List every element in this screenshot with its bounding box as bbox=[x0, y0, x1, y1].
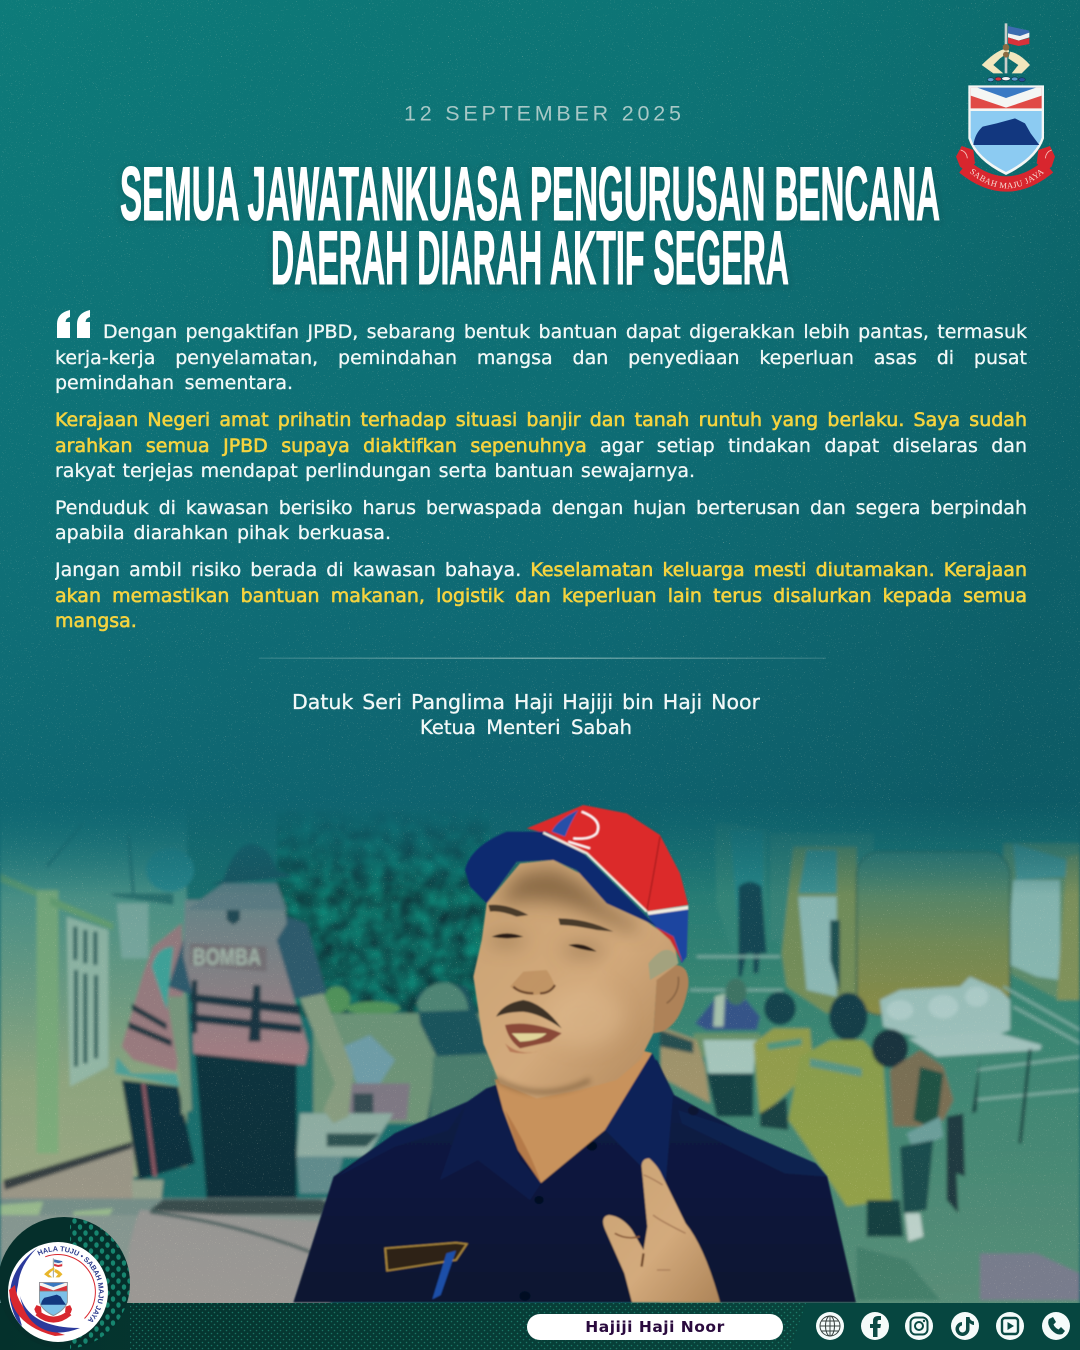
label: BOMBA: BOMBA bbox=[193, 944, 261, 971]
name pill bbox=[527, 1314, 783, 1340]
photo: relief centre with tents bbox=[660, 800, 1080, 1310]
main rescuer bbox=[166, 916, 327, 999]
icon: website globe bbox=[816, 1312, 844, 1340]
name badge bbox=[385, 1243, 467, 1271]
tent frame left bbox=[782, 847, 857, 1013]
date: 12 SEPTEMBER 2025 bbox=[404, 102, 681, 126]
icon: youtube bbox=[996, 1312, 1024, 1340]
text: Kerajaan Negeri amat prihatin terhadap situasi banjir dan tanah runtuh yang berlaku. Saya sudah bbox=[55, 409, 1027, 431]
social icons bbox=[816, 1312, 1070, 1340]
flag pole bbox=[1005, 23, 1007, 73]
paragraph 1 bbox=[55, 321, 1027, 394]
text: kerja-kerja penyelamatan, pemindahan mangsa dan penyediaan keperluan asas di pusat bbox=[55, 347, 1027, 369]
small crest bbox=[34, 1258, 72, 1320]
logo badge: Hala Tuju Sabah Maju Jaya bbox=[0, 1217, 130, 1349]
volunteer seated right bbox=[872, 1029, 908, 1068]
floor mats bbox=[857, 1247, 940, 1300]
volunteer vest 2 bbox=[829, 993, 868, 1041]
icon: tiktok bbox=[951, 1312, 979, 1340]
text: rakyat terjejas mendapat perlindungan serta bantuan sewajarnya. bbox=[55, 460, 695, 482]
swooshes bbox=[10, 1248, 37, 1326]
cap crown bbox=[527, 805, 688, 912]
volunteer vest 1 bbox=[764, 992, 796, 1025]
eyes bbox=[492, 933, 597, 952]
paragraph 3 bbox=[55, 497, 1027, 544]
boat floor bbox=[0, 1146, 136, 1200]
raised hand bbox=[603, 1158, 720, 1302]
second rescuer bbox=[115, 1057, 180, 1087]
cap emblem bbox=[552, 810, 578, 837]
paragraph 2 bbox=[55, 409, 1027, 482]
neck bbox=[495, 1040, 652, 1183]
signatory role: Ketua Menteri Sabah bbox=[420, 716, 632, 739]
icon: facebook bbox=[861, 1312, 889, 1340]
portrait: chief minister bbox=[293, 805, 856, 1302]
face bbox=[473, 860, 678, 1098]
floor lines bbox=[690, 957, 1080, 1100]
chair bbox=[738, 882, 767, 977]
woman at table bbox=[695, 997, 760, 1030]
photo: rescuers by flooded building bbox=[0, 823, 660, 1303]
boat cargo bbox=[343, 1035, 395, 1083]
text: pemindahan sementara. bbox=[55, 372, 293, 394]
building wall bbox=[0, 840, 190, 1184]
arms holding pole bbox=[982, 45, 1030, 73]
signature bbox=[292, 690, 760, 739]
divider bbox=[259, 658, 826, 659]
flood ground bbox=[313, 1013, 520, 1123]
state crest: Sabah coat of arms bbox=[956, 23, 1055, 184]
flag bbox=[1008, 26, 1029, 37]
title bbox=[120, 152, 940, 301]
icon: instagram bbox=[905, 1312, 933, 1340]
table bbox=[908, 1032, 1042, 1057]
moustache bbox=[496, 1000, 562, 1028]
text: apabila diarahkan pihak berkuasa. bbox=[55, 522, 391, 544]
collar left bbox=[440, 1088, 541, 1200]
text: akan memastikan bantuan makanan, logistik dan keperluan lain terus disalurkan kepada semua bbox=[55, 585, 1027, 607]
collar right bbox=[605, 1053, 673, 1190]
shirt bbox=[293, 1060, 856, 1302]
boat hull lower bbox=[0, 1215, 330, 1310]
body text bbox=[55, 321, 1027, 632]
main tent panel bbox=[857, 852, 1010, 1015]
cap back panel bbox=[647, 907, 688, 963]
nose bbox=[510, 970, 555, 995]
chin shadow bbox=[495, 1078, 590, 1092]
mountain bbox=[973, 118, 1039, 145]
volunteer left bbox=[660, 1027, 710, 1103]
text: arahkan semua JPBD supaya diaktifkan sepenuhnya agar setiap tindakan dapat diselaras dan bbox=[55, 435, 1027, 457]
third rescuer bbox=[417, 985, 493, 1123]
quote mark icon bbox=[57, 310, 90, 338]
text: Penduduk di kawasan berisiko harus berwaspada dengan hujan berterusan dan segera berpindah bbox=[55, 497, 1027, 519]
icon: phone bbox=[1042, 1312, 1070, 1340]
logo ring text: HALA TUJU • SABAH MAJU JAYA bbox=[37, 1246, 104, 1322]
eyebrows bbox=[488, 905, 613, 932]
food packs bbox=[880, 977, 1010, 1038]
text: Jangan ambil risiko berada di kawasan bahaya. Keselamatan keluarga mesti diutamakan. Kerajaan bbox=[55, 559, 1027, 581]
background photo collage bbox=[0, 780, 1080, 1310]
ear bbox=[653, 965, 689, 1033]
pen bbox=[432, 1251, 456, 1299]
inflatable boat bbox=[0, 1194, 328, 1216]
signatory name: Datuk Seri Panglima Haji Hajiji bin Haji Noor bbox=[292, 690, 760, 714]
crest motto: SABAH MAJU JAYA bbox=[970, 169, 1044, 188]
shield bbox=[968, 85, 1044, 175]
mouth bbox=[505, 1024, 562, 1048]
footer band bbox=[0, 1303, 1080, 1350]
wreath bbox=[987, 77, 1025, 82]
head bbox=[465, 805, 689, 1098]
photo colour tint bbox=[0, 844, 1080, 1276]
text: Dengan pengaktifan JPBD, sebarang bentuk bantuan dapat digerakkan lebih pantas, termasuk bbox=[103, 321, 1027, 343]
name pill: Hajiji Haji Noor bbox=[585, 1318, 725, 1336]
paragraph 4 bbox=[55, 559, 1027, 632]
text: mangsa. bbox=[55, 610, 137, 632]
cap brim bbox=[465, 832, 657, 927]
trees bbox=[277, 810, 490, 1017]
ribbon bbox=[964, 167, 1048, 184]
